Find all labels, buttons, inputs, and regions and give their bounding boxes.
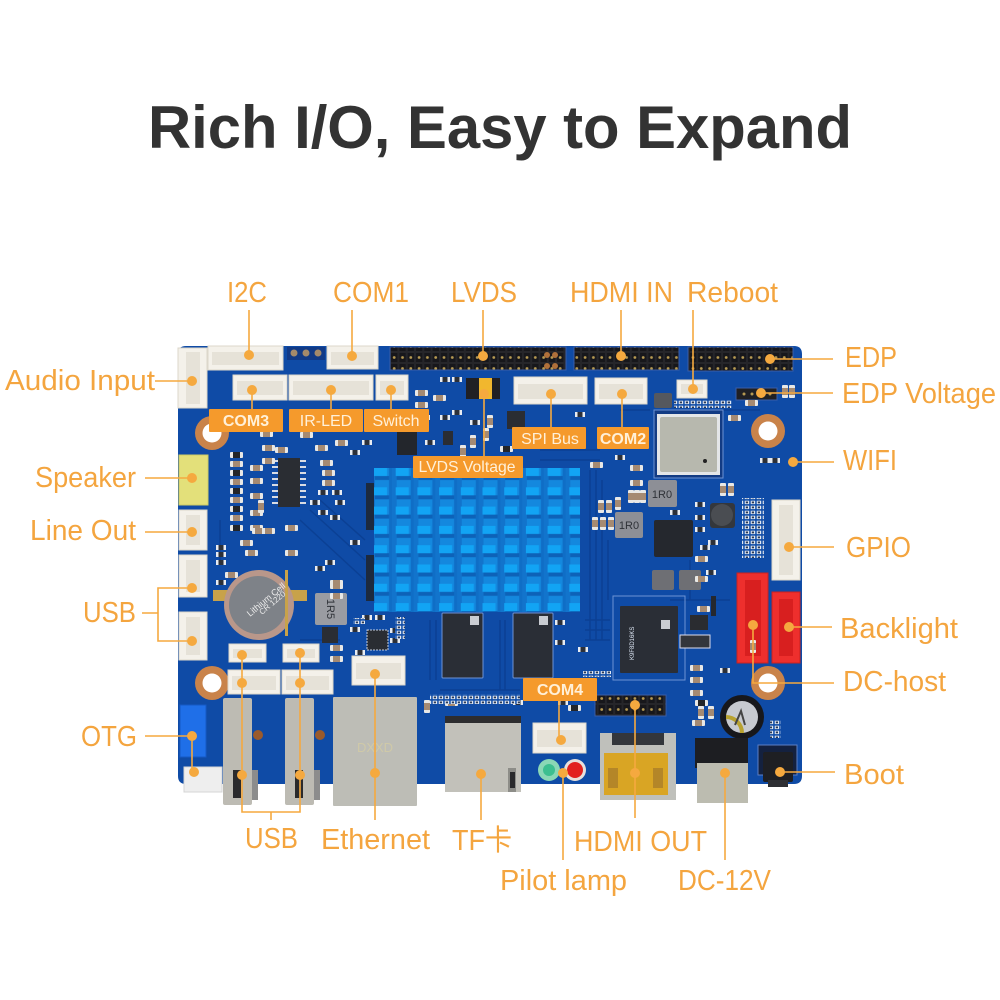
tag: Switch (364, 385, 429, 432)
callout: GPIO (784, 532, 911, 564)
callout: Boot (775, 759, 904, 791)
tag: COM3: COM3 (223, 413, 269, 430)
callout: WIFI: WIFI (843, 445, 897, 477)
tag: LVDS Voltage: LVDS Voltage (418, 459, 516, 476)
small surface-mount parts (216, 377, 795, 738)
callout: EDP Voltage (756, 378, 996, 410)
DC power jack (695, 738, 748, 803)
circuit board (178, 346, 802, 806)
coin cell battery (213, 570, 307, 640)
tag: COM2 (597, 389, 649, 449)
title: Rich I/O, Easy to Expand (148, 94, 852, 161)
callout: EDP (765, 342, 897, 374)
mounting holes (195, 414, 785, 700)
callout: Ethernet: Ethernet (321, 824, 430, 856)
inductors: 1R0 (652, 489, 672, 501)
red backlight connectors (737, 573, 800, 663)
callout: Speaker: Speaker (35, 462, 136, 494)
pin headers (287, 347, 793, 716)
copper traces (215, 410, 760, 696)
status LEDs (538, 759, 586, 781)
micro USB port (184, 767, 222, 792)
callout: OTG (81, 721, 199, 777)
callout: Backlight: Backlight (840, 613, 958, 645)
callout: COM1: COM1 (333, 277, 409, 309)
callout: LVDS (451, 277, 517, 361)
callout: I2C (227, 277, 267, 360)
board PCB (178, 346, 802, 784)
callout: USB left (83, 583, 197, 646)
connector inner shading (186, 352, 793, 747)
callout: COM1 (333, 277, 409, 361)
callout: Line Out: Line Out (30, 515, 136, 547)
callout: Reboot: Reboot (687, 277, 778, 309)
callout: USB bottom (237, 648, 305, 855)
HDMI port (600, 733, 676, 800)
tag: SPI Bus: SPI Bus (521, 431, 579, 448)
tag: COM2: COM2 (600, 431, 646, 448)
callout: HDMI IN (570, 277, 673, 361)
callout: GPIO: GPIO (846, 532, 911, 564)
callout: Pilot lamp: Pilot lamp (500, 865, 627, 897)
capacitor (720, 695, 764, 739)
callout: DC-12V: DC-12V (678, 865, 772, 897)
callout: Audio Input: Audio Input (5, 365, 155, 397)
callout: Reboot (687, 277, 778, 394)
callout: Backlight (784, 613, 958, 645)
callout: OTG: OTG (81, 721, 137, 753)
callout: EDP: EDP (845, 342, 897, 374)
white connectors (178, 346, 800, 753)
callout: DC-12V (678, 768, 772, 897)
inductors (315, 393, 735, 625)
callout: Line Out (30, 515, 197, 547)
callout: LVDS: LVDS (451, 277, 517, 309)
inductors: 1R0 (619, 520, 639, 532)
callout: Ethernet (321, 669, 430, 856)
tag: IR-LED: IR-LED (300, 413, 352, 430)
tag: SPI Bus (512, 389, 586, 449)
callout: DC-host: DC-host (843, 666, 946, 698)
coin cell battery: Lithium Cell (245, 581, 287, 619)
callout: I2C: I2C (227, 277, 267, 309)
tag: COM3 (209, 385, 283, 432)
callout: TF card: TF卡 (452, 824, 512, 857)
callout: Pilot lamp (500, 768, 627, 897)
coin cell battery: CR 1220 (258, 589, 288, 617)
tag: Switch: Switch (372, 413, 420, 430)
callout: TF card (452, 769, 512, 857)
USB ports (223, 698, 325, 805)
tag: IR-LED (289, 385, 363, 432)
callout: DC-host (748, 620, 946, 698)
callout: HDMI IN: HDMI IN (570, 277, 673, 309)
callout: Speaker (35, 462, 197, 494)
callout: Boot: Boot (844, 759, 904, 791)
Ethernet port: DXXD (357, 740, 393, 755)
callout: USB left: USB (83, 597, 136, 629)
OTG blue connector (180, 705, 206, 757)
boot switch (758, 745, 797, 787)
memory and flash chips: K9F8D16KS (630, 627, 636, 660)
callout: USB bottom: USB (245, 823, 298, 855)
TF card slot (445, 716, 521, 792)
heat sink (366, 468, 580, 612)
integrated circuits (272, 411, 716, 650)
callout: WIFI (788, 445, 897, 477)
wifi module (654, 410, 723, 478)
callout: HDMI OUT: HDMI OUT (574, 826, 707, 858)
tag: COM4: COM4 (537, 682, 583, 699)
tag: COM4 (523, 678, 597, 745)
tag: LVDS Voltage (413, 389, 523, 478)
memory and flash chips (442, 596, 685, 680)
speaker connector (179, 455, 208, 505)
Ethernet port (333, 697, 417, 806)
inductors: 1R5 (324, 599, 336, 619)
callout: HDMI OUT (574, 700, 707, 858)
